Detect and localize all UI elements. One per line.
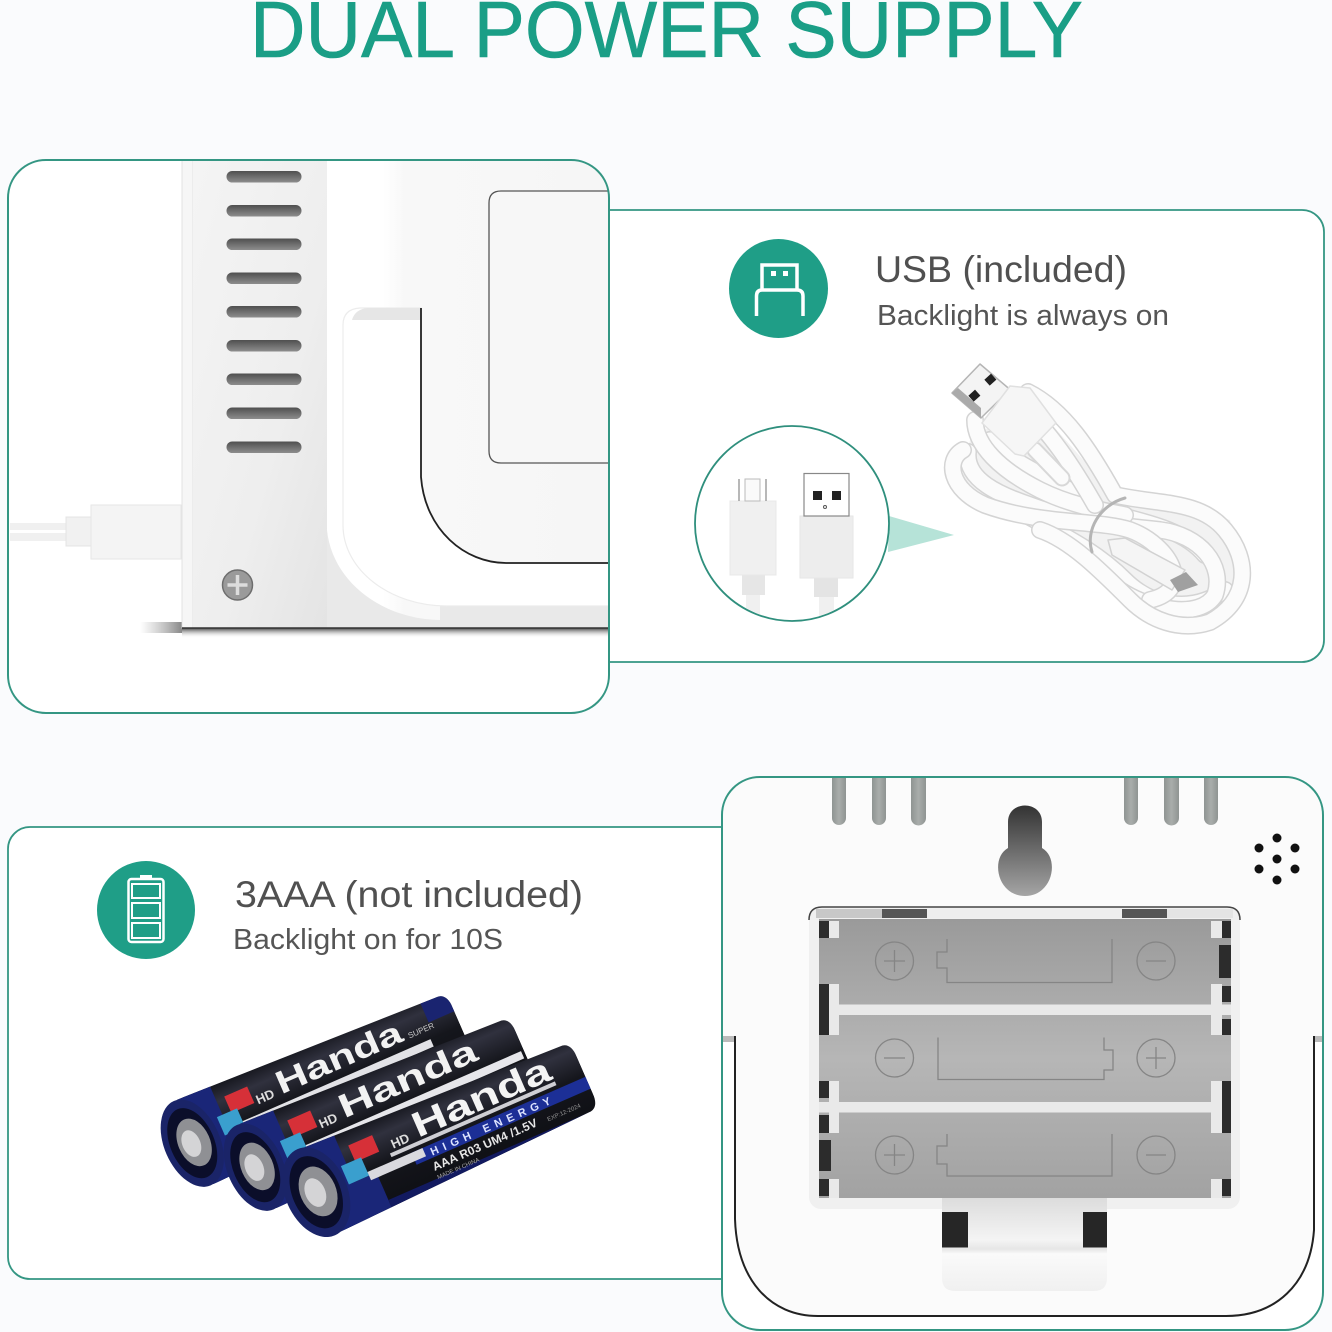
illustration: three AAA batteries	[160, 996, 596, 1237]
battery: back: SUPER	[407, 1021, 436, 1040]
icon: screw	[222, 570, 252, 600]
vent slots	[226, 171, 302, 453]
illustration: coiled USB cable	[952, 364, 1245, 628]
battery door tab	[942, 1198, 1107, 1291]
USB description: Backlight is always on	[877, 300, 1169, 332]
battery: front: HIGH ENERGY	[429, 1095, 553, 1158]
panel: device side view with USB cable	[8, 160, 610, 713]
USB heading: USB (included)	[875, 249, 1127, 290]
icon: speaker holes	[1254, 834, 1300, 884]
panel: battery information	[8, 827, 768, 1279]
battery: front: Handa	[406, 1050, 558, 1145]
battery: front: HD	[388, 1130, 412, 1151]
stand outline	[735, 1036, 1314, 1316]
callout: cable connectors	[695, 426, 889, 625]
vents	[832, 778, 1218, 826]
battery: middle: HD	[316, 1110, 340, 1131]
plugged USB cable	[10, 505, 181, 559]
icon: keyhole	[998, 806, 1052, 896]
battery heading: 3AAA (not included)	[235, 874, 583, 915]
dividers and posts	[819, 921, 1231, 1198]
battery: front: EXP:12-2024	[547, 1103, 582, 1123]
battery: back: HD	[253, 1086, 277, 1107]
device back plate	[723, 1036, 1322, 1042]
battery: back: Handa	[270, 1014, 408, 1101]
dark contact openings	[819, 921, 1231, 1196]
arrow: callout pointer	[888, 516, 954, 552]
battery: middle: Handa	[332, 1031, 483, 1125]
panel: device back with battery compartment	[722, 777, 1323, 1330]
battery: back	[160, 996, 464, 1187]
panel border	[722, 777, 1323, 1330]
battery compartment	[809, 907, 1240, 1209]
battery description: Backlight on for 10S	[233, 924, 503, 956]
panel: USB information	[570, 210, 1324, 662]
icon: USB plug	[729, 239, 828, 338]
icon: battery	[97, 861, 195, 959]
polarity markings	[876, 939, 1175, 1176]
panel border	[8, 160, 609, 713]
battery: front	[284, 1045, 596, 1237]
device body	[140, 160, 610, 638]
battery: middle	[224, 1020, 528, 1211]
battery: front: MADE IN CHINA	[437, 1157, 481, 1181]
battery: front: AAA R03 UM4 /1.5V	[430, 1116, 539, 1174]
